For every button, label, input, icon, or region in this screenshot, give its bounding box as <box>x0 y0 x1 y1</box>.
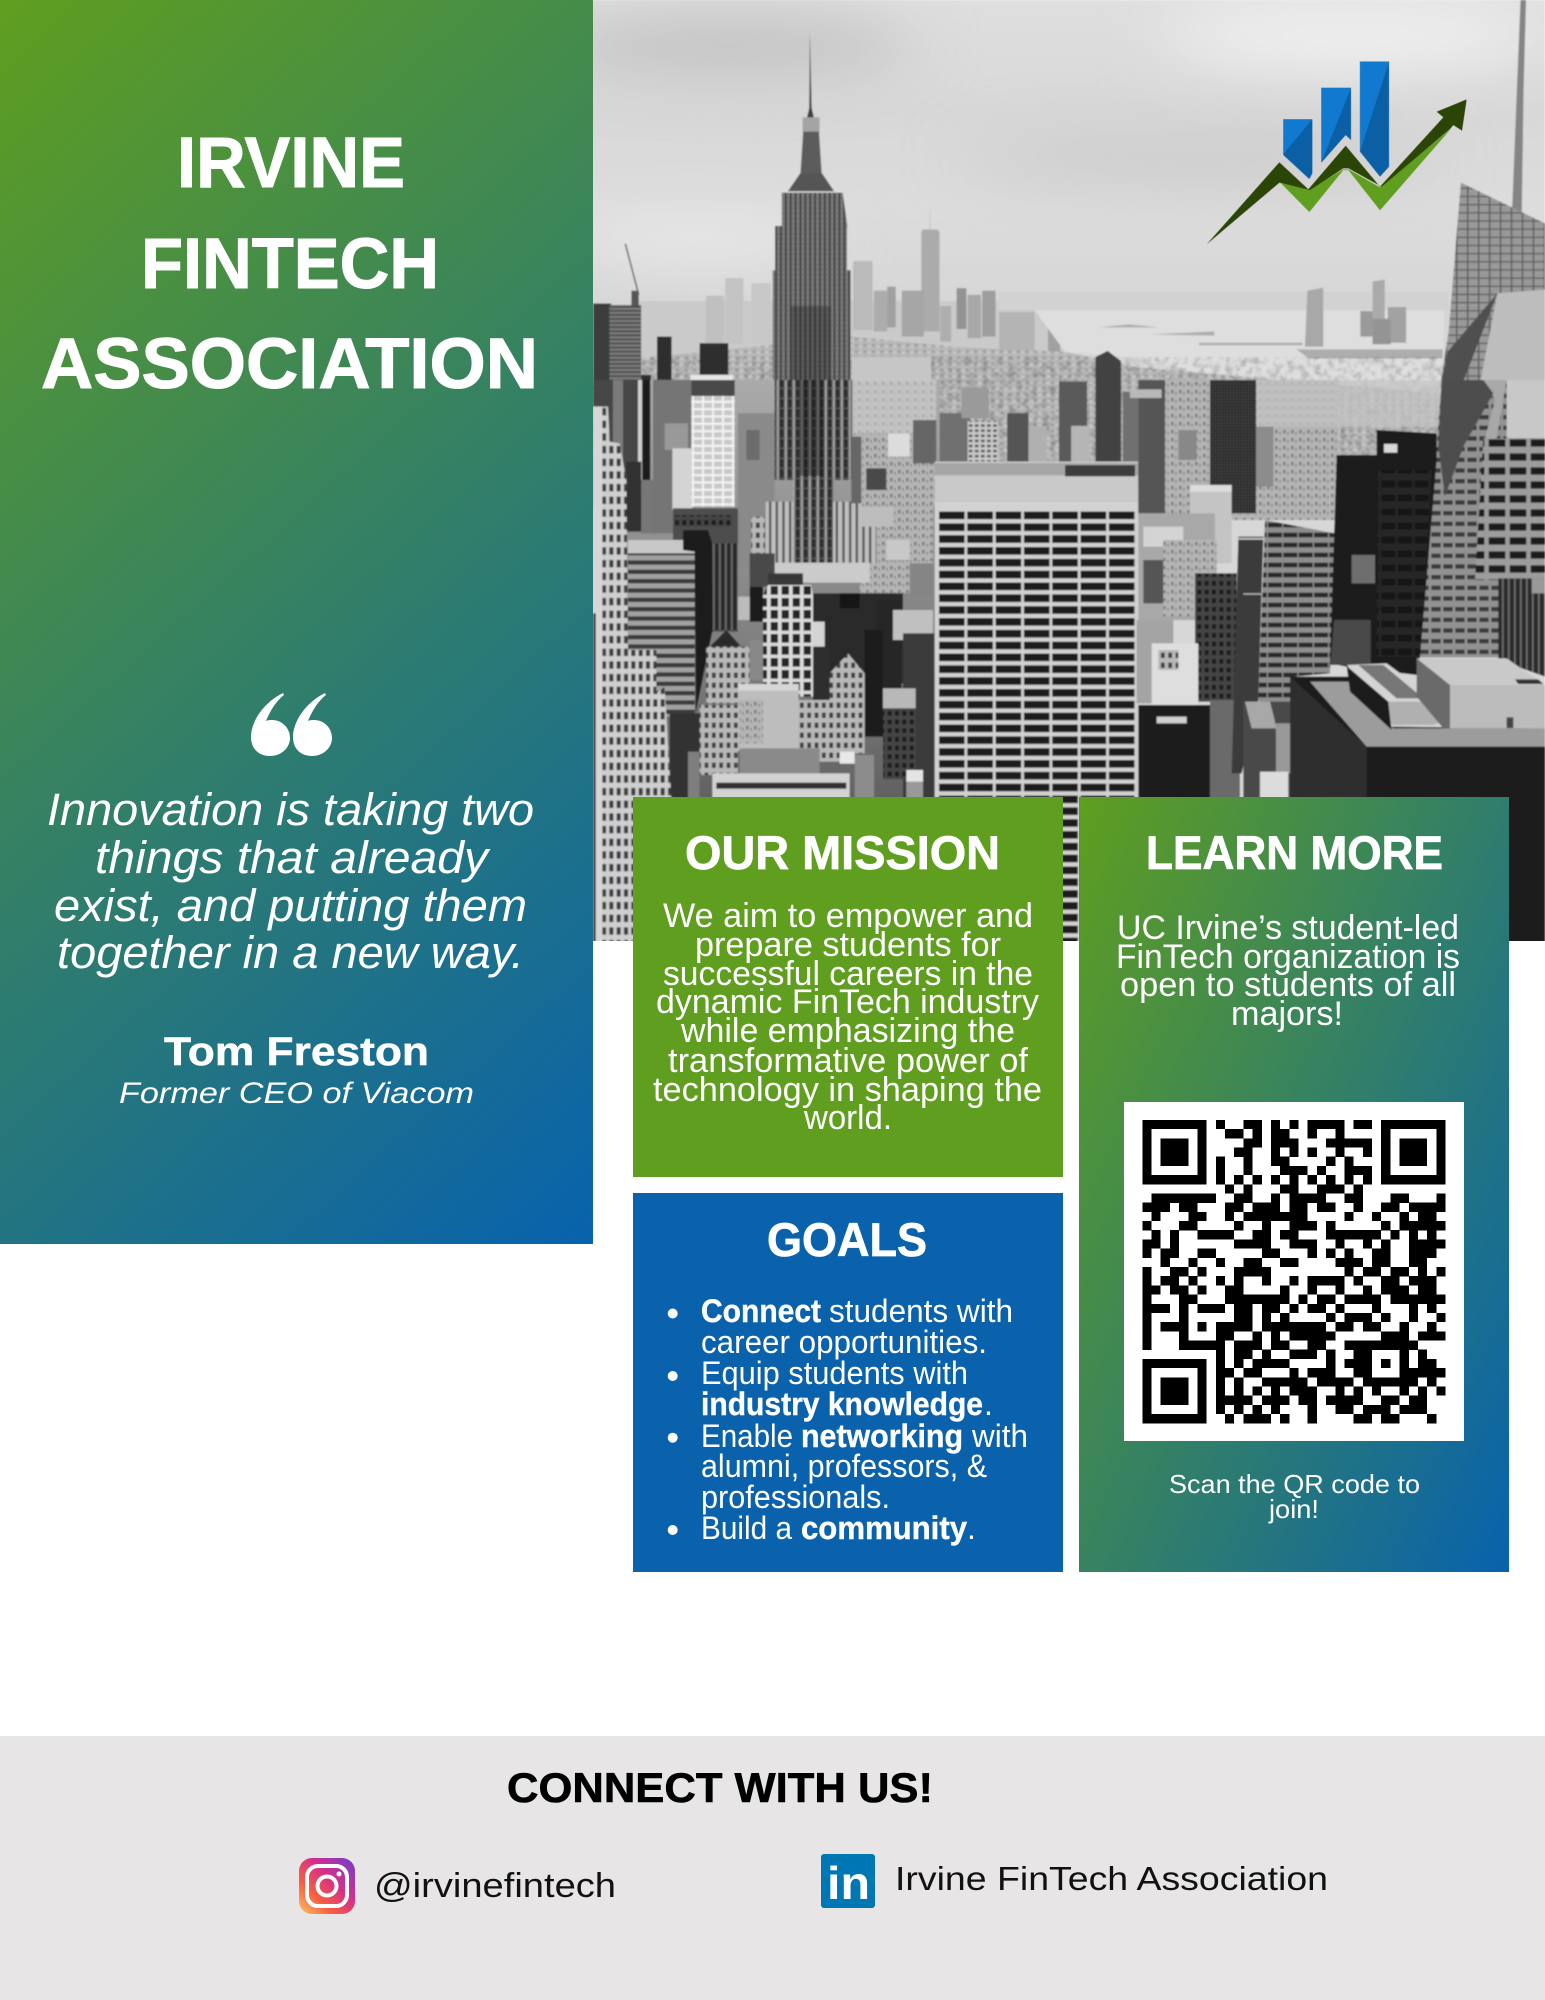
mission text: world. <box>803 1099 892 1137</box>
harbor water <box>1035 310 1440 378</box>
BoA glass tower <box>1417 380 1545 657</box>
learn more text: open to students of all <box>1120 966 1456 1004</box>
learn more text: majors! <box>1231 995 1343 1033</box>
icon: linkedin: in <box>827 1857 870 1909</box>
panel: left gradient title and quote <box>0 0 593 1244</box>
Empire State Building tower <box>773 32 851 388</box>
learn more text: FinTech organization is <box>1116 938 1460 976</box>
goals bullet list: Enable <box>701 1418 793 1454</box>
distant haze skyline <box>639 218 1064 360</box>
Empire State Building base <box>766 380 876 564</box>
goals bullet list: community <box>801 1510 967 1546</box>
mission text: transformative power of <box>668 1042 1029 1080</box>
goals bullet list: networking <box>801 1418 963 1454</box>
scan instruction: Scan the QR code to <box>1169 1469 1420 1499</box>
scan instruction <box>1169 1469 1420 1524</box>
goals bullet list: professionals. <box>701 1479 890 1515</box>
goals bullet list: career opportunities. <box>701 1324 987 1360</box>
goals bullet list: . <box>967 1510 976 1546</box>
title: Irvine FinTech Association: FINTECH <box>141 225 439 304</box>
upper right skyscraper with antenna <box>1440 0 1545 388</box>
goals bullet list: Equip students with <box>701 1355 968 1391</box>
panel: goals <box>633 1193 1063 1572</box>
lower left city blocks <box>593 380 940 947</box>
scan instruction: join! <box>1268 1494 1319 1524</box>
icon: instagram <box>299 1858 355 1914</box>
learn more text <box>1116 909 1460 1033</box>
title: Irvine FinTech Association: ASSOCIATION <box>41 325 538 404</box>
lower right buildings <box>1130 380 1545 947</box>
dark glass office tower <box>1330 430 1437 675</box>
mission text: technology in shaping the <box>653 1071 1042 1109</box>
quote text: Innovation is taking two <box>47 784 534 835</box>
mission text: while emphasizing the <box>680 1012 1015 1050</box>
learn more text: UC Irvine’s student-led <box>1117 909 1459 947</box>
New Jersey towers <box>1305 279 1406 347</box>
office building with window bands <box>935 462 1138 946</box>
goals bullet list: industry knowledge <box>701 1386 983 1422</box>
QR code <box>1124 1102 1464 1441</box>
photo: black and white New York skyline <box>547 0 1545 947</box>
mid-distance buildings behind office block <box>939 350 1140 462</box>
mission text: We aim to empower and <box>663 897 1033 935</box>
goals bullet list: . <box>984 1386 993 1422</box>
quote attribution role: Former CEO of Viacom <box>119 1077 474 1110</box>
goals bullet list: Build a <box>701 1510 792 1546</box>
panel: learn more <box>1079 797 1509 1572</box>
mission text <box>653 897 1042 1137</box>
quote attribution name: Tom Freston <box>164 1030 429 1074</box>
panel: connect footer <box>0 1736 1545 2000</box>
heading: learn more: LEARN MORE <box>1146 826 1443 879</box>
icon: quotation mark <box>251 693 332 756</box>
icon: company logo with bars and arrow <box>1207 62 1467 244</box>
title: Irvine FinTech Association <box>41 124 538 404</box>
goals bullet list: Connect <box>701 1293 821 1329</box>
quote text: things that already <box>95 832 491 883</box>
linkedin name: Irvine FinTech Association <box>895 1860 1328 1897</box>
mission text: successful careers in the <box>663 955 1033 993</box>
mission text: prepare students for <box>695 926 1001 964</box>
foreground roofs and mechanical block <box>1290 658 1545 947</box>
title: Irvine FinTech Association: IRVINE <box>177 124 405 203</box>
goals bullet list: alumni, professors, & <box>701 1448 987 1484</box>
mid-distance city base <box>590 337 1443 510</box>
instagram handle: @irvinefintech <box>374 1867 616 1905</box>
heading: goals: GOALS <box>767 1213 927 1266</box>
quote text: exist, and putting them <box>54 880 527 931</box>
panel: our mission <box>633 797 1063 1177</box>
heading: connect with us: CONNECT WITH US! <box>507 1764 933 1811</box>
mission text: dynamic FinTech industry <box>656 983 1039 1021</box>
goals bullet list: students with <box>829 1293 1013 1329</box>
quote text <box>47 784 534 978</box>
upper left towers <box>593 244 931 458</box>
heading: our mission: OUR MISSION <box>685 826 1000 879</box>
goals bullet list: with <box>971 1418 1028 1454</box>
goals bullet list <box>668 1293 1028 1546</box>
quote text: together in a new way. <box>57 927 524 978</box>
